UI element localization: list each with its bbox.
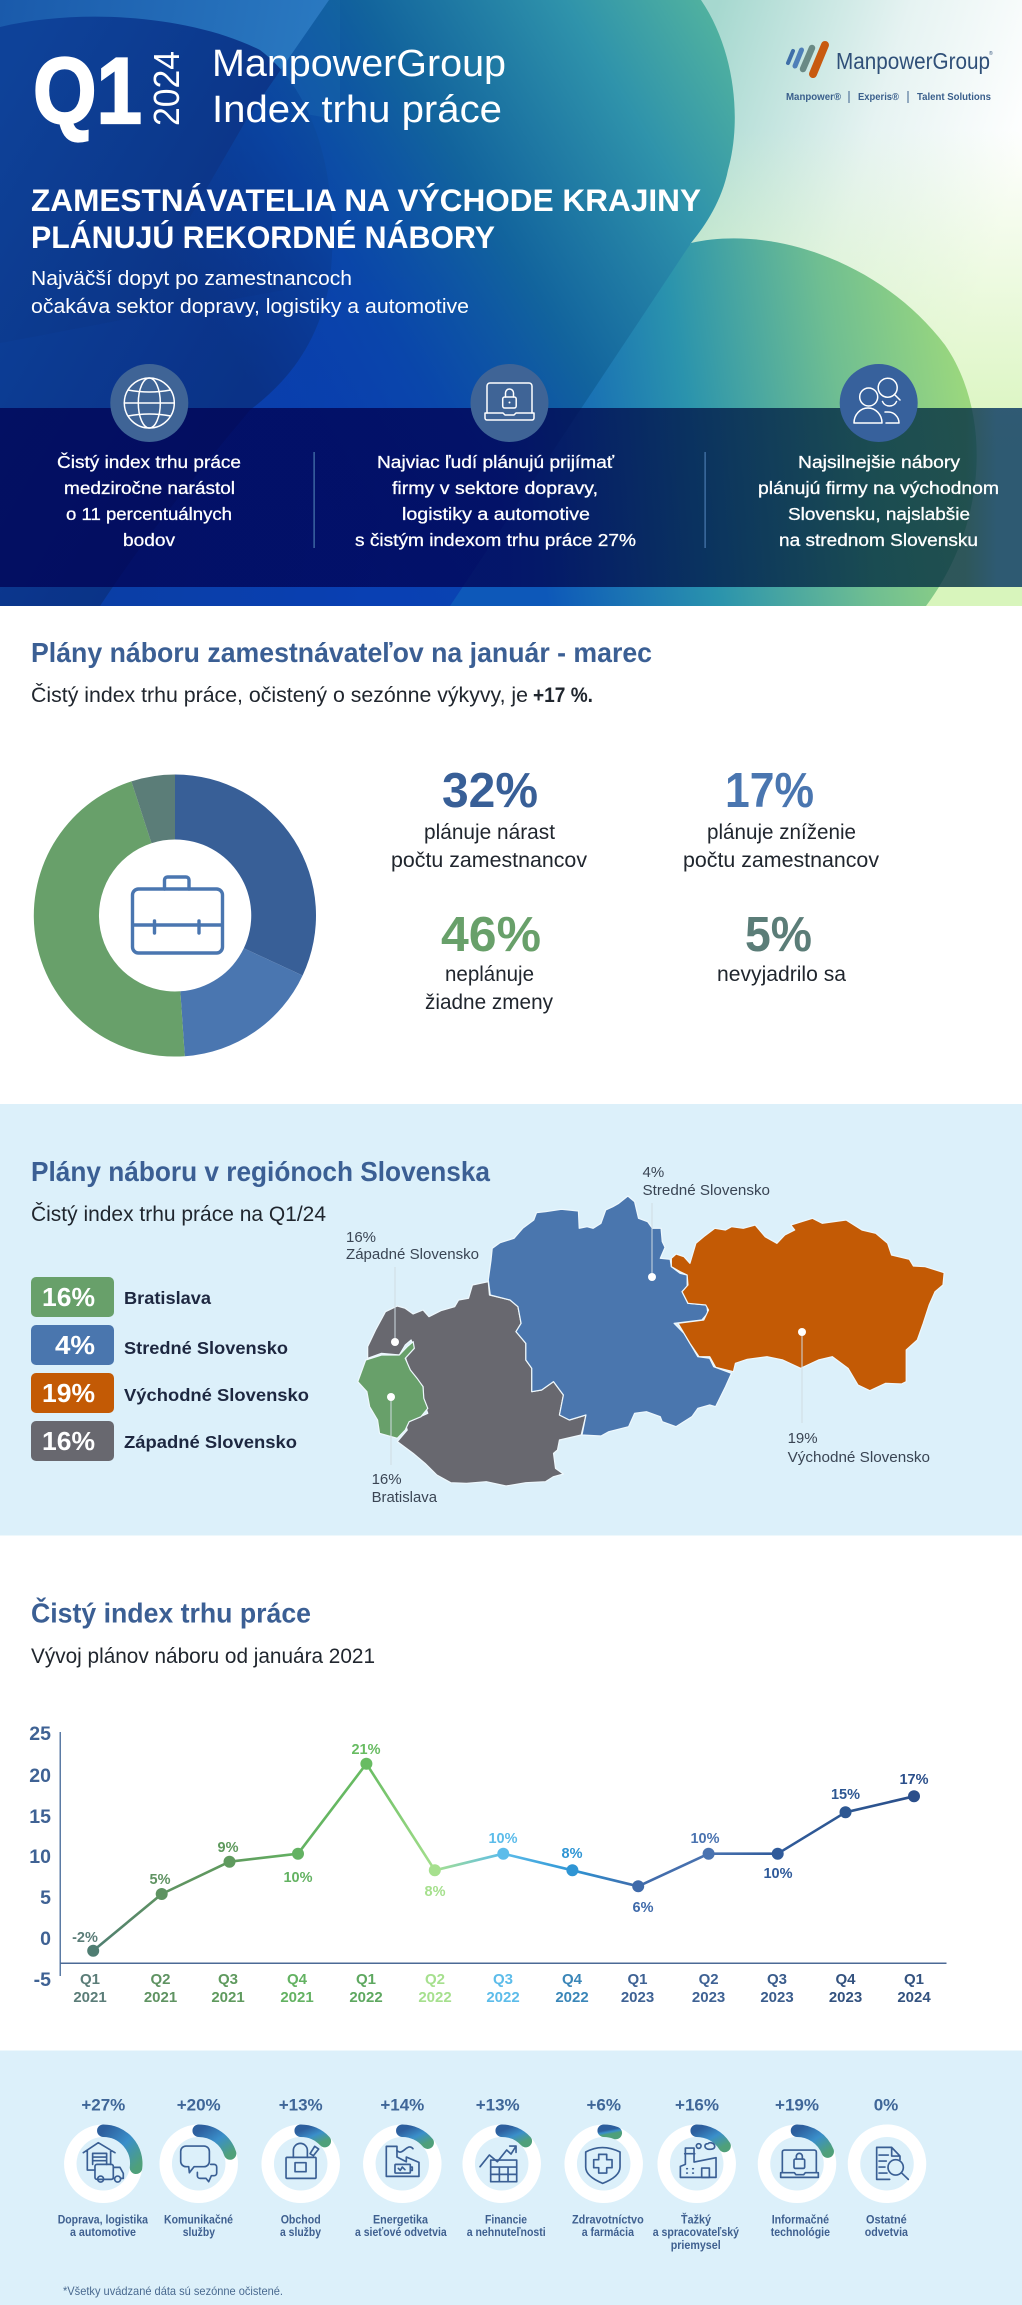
report title: Index trhu práce	[212, 89, 502, 131]
sector: transport: +27%	[81, 2096, 125, 2115]
data labels: 10%	[283, 1870, 313, 1886]
y axis with labels	[29, 1723, 61, 1991]
logo: ManpowerGroup: ManpowerGroup	[836, 48, 990, 74]
region: Bratislava	[358, 1342, 428, 1438]
stat: 5%	[717, 908, 846, 986]
legend: Bratislava	[124, 1288, 211, 1308]
data labels: 10%	[690, 1831, 720, 1847]
quarter labels: Q1	[627, 1971, 648, 1988]
sector: industry: +16%	[675, 2096, 719, 2115]
text block: year-on-year growth: o 11 percentuálnych	[66, 504, 232, 524]
quarter labels: Q4	[287, 1971, 308, 1988]
text block: transport sector: Najviac ľudí plánujú prijímať	[377, 452, 614, 472]
quarter labels: 2024	[897, 1989, 931, 2006]
stat: 46%	[425, 908, 553, 1014]
callout: Stredné Slovensko	[642, 1164, 770, 1281]
text block: year-on-year growth: bodov	[123, 530, 175, 550]
sector: transport	[58, 2096, 148, 2239]
quarter labels: 2022	[418, 1989, 452, 2006]
stat: 46%: neplánuje	[445, 963, 534, 986]
sector: IT: Informačné	[772, 2212, 829, 2226]
callout: Bratislava	[372, 1393, 438, 1506]
text block: regions	[758, 452, 999, 550]
logo: ManpowerGroup: Manpower®	[786, 91, 841, 103]
sector: IT	[764, 2096, 830, 2239]
logo: ManpowerGroup: Experis®	[858, 91, 899, 103]
quarter labels: Q1	[904, 1971, 924, 1988]
sector: energy	[355, 2096, 447, 2239]
legend: 16%	[42, 1282, 95, 1312]
sub-headline	[31, 267, 469, 318]
quarter labels: 2021	[144, 1989, 177, 2006]
quarter labels: 2023	[829, 1989, 862, 2006]
big Q1 mark: Q1	[33, 38, 142, 143]
logo: ManpowerGroup	[786, 45, 993, 103]
text block: regions: na strednom Slovensku	[779, 530, 978, 550]
text block: regions: Najsilnejšie nábory	[798, 452, 960, 472]
legend: 19%	[42, 1378, 95, 1408]
callout: Západné Slovensko	[346, 1229, 479, 1346]
stat: 32%: počtu zamestnancov	[391, 849, 588, 872]
logo: ManpowerGroup: Talent Solutions	[917, 91, 991, 103]
data labels: 9%	[218, 1840, 239, 1856]
stat: 17%	[683, 764, 880, 872]
data labels: 5%	[150, 1872, 171, 1888]
callout: Západné Slovensko: 16%	[346, 1229, 376, 1246]
callout: Bratislava: 16%	[372, 1471, 402, 1488]
data labels	[72, 1742, 929, 1946]
quarter labels: Q3	[493, 1971, 513, 1988]
quarter labels: Q3	[767, 1971, 787, 1988]
text block: regions: Slovensku, najslabšie	[788, 504, 970, 524]
sector: communication: +20%	[177, 2096, 221, 2115]
sector: trade: a služby	[280, 2225, 321, 2239]
callout: Bratislava: Bratislava	[372, 1489, 438, 1506]
text block: regions: plánujú firmy na východnom	[758, 478, 999, 498]
stat: 5%: 5%	[745, 908, 812, 962]
data labels: 15%	[831, 1787, 860, 1803]
heading: Plány náboru v regiónoch Slovenska	[31, 1156, 491, 1187]
stat: 17%: počtu zamestnancov	[683, 849, 880, 872]
quarter labels: 2021	[211, 1989, 245, 2006]
sector: other: 0%	[874, 2096, 898, 2115]
text block: transport sector: s čistým indexom trhu práce 27%	[355, 530, 636, 550]
sector: transport: a automotive	[70, 2225, 136, 2239]
sector: finance: a nehnuteľnosti	[467, 2225, 546, 2239]
data points	[87, 1758, 920, 1957]
rotated year 2024: 2024	[146, 51, 187, 126]
dark info band	[0, 408, 1022, 587]
sector: communication: služby	[183, 2225, 215, 2239]
icon: briefcase	[132, 877, 222, 953]
headline: ZAMESTNÁVATELIA NA VÝCHODE KRAJINY	[31, 182, 701, 218]
stat: 46%: žiadne zmeny	[425, 991, 553, 1014]
region: Západné Slovensko	[368, 1282, 586, 1486]
stat: 17%: 17%	[725, 764, 814, 818]
legend: 16%	[42, 1426, 95, 1456]
report title	[212, 43, 506, 131]
y axis with labels: 10	[29, 1846, 51, 1868]
quarter labels: Q1	[80, 1971, 100, 1988]
y axis with labels: 15	[29, 1806, 51, 1828]
sub-headline: Najväčší dopyt po zamestnancoch	[31, 267, 352, 290]
panel: hiring plans	[0, 606, 1022, 1104]
sector: trade: Obchod	[281, 2212, 321, 2226]
sector: other: Ostatné	[866, 2212, 907, 2226]
sector: healthcare: +6%	[586, 2096, 621, 2115]
data labels: -2%	[72, 1930, 98, 1946]
x axis	[60, 1962, 946, 1964]
data labels: 6%	[633, 1900, 654, 1916]
stat: 46%: 46%	[441, 908, 541, 962]
quarter labels: 2022	[486, 1989, 520, 2006]
legend: Západné Slovensko	[124, 1432, 297, 1452]
data labels: 17%	[899, 1772, 929, 1788]
panel: header banner	[0, 0, 1022, 606]
heading: Plány náboru zamestnávateľov na január - marec	[31, 637, 652, 668]
donut chart	[34, 774, 316, 1057]
stat: 32%	[391, 764, 588, 872]
sector: other	[854, 2096, 920, 2239]
quarter labels: Q3	[218, 1971, 238, 1988]
quarter labels: Q2	[699, 1971, 719, 1988]
panel: sectors	[0, 2050, 1022, 2305]
sector: finance: +13%	[476, 2096, 520, 2115]
quarter labels: 2022	[555, 1989, 589, 2006]
sector: healthcare: Zdravotníctvo	[572, 2212, 644, 2226]
stat: 17%: plánuje zníženie	[707, 821, 856, 844]
region: Východné Slovensko	[671, 1218, 944, 1391]
logo: ManpowerGroup: ®	[989, 50, 993, 57]
callout: Stredné Slovensko: 4%	[642, 1164, 664, 1181]
sector: trade: +13%	[279, 2096, 323, 2115]
text block: transport sector: firmy v sektore dopravy,	[392, 478, 598, 498]
stat: 32%: plánuje nárast	[424, 821, 555, 844]
data labels: 8%	[562, 1846, 583, 1862]
text block: transport sector	[355, 452, 636, 550]
headline: PLÁNUJÚ REKORDNÉ NÁBORY	[31, 219, 495, 255]
sector: finance	[467, 2096, 546, 2239]
sector: other: odvetvia	[865, 2225, 908, 2239]
quarter labels: Q2	[150, 1971, 171, 1988]
quarter labels: 2021	[280, 1989, 314, 2006]
panel: regions of Slovakia	[0, 1104, 1022, 1536]
footnote: *Všetky uvádzané dáta sú sezónne očistené.	[63, 2284, 283, 2298]
sector: communication	[164, 2096, 233, 2239]
sector: industry	[653, 2096, 739, 2252]
sector: industry: a spracovateľský	[653, 2225, 739, 2239]
stat: 32%: 32%	[442, 764, 538, 818]
header background shapes	[0, 0, 1022, 606]
quarter labels: 2022	[349, 1989, 383, 2006]
sector: healthcare: a farmácia	[582, 2225, 634, 2239]
text block: year-on-year growth: Čistý index trhu práce	[57, 451, 241, 472]
panel: net employment outlook trend	[0, 1536, 1022, 2050]
quarter labels: 2021	[73, 1989, 107, 2006]
quarter labels: Q4	[562, 1971, 583, 1988]
callout: Stredné Slovensko: Stredné Slovensko	[642, 1182, 770, 1199]
y axis with labels: 0	[40, 1928, 51, 1950]
legend: Východné Slovensko	[124, 1385, 309, 1405]
data labels: 10%	[763, 1866, 793, 1882]
quarter labels: 2023	[692, 1989, 725, 2006]
data labels: 10%	[488, 1831, 518, 1847]
quarter labels: Q1	[356, 1971, 376, 1988]
icon: laptop with lock	[470, 364, 548, 442]
quarter labels	[73, 1971, 931, 2006]
divider lines	[314, 452, 706, 548]
callout: Východné Slovensko: Východné Slovensko	[788, 1449, 930, 1466]
headline	[31, 182, 701, 255]
sector: finance: Financie	[485, 2212, 527, 2226]
quarter labels: 2023	[760, 1989, 794, 2006]
text block: year-on-year growth	[57, 451, 241, 550]
text block: transport sector: logistiky a automotive	[402, 504, 590, 524]
legend: 4%	[55, 1330, 95, 1360]
line chart	[29, 1723, 946, 2006]
callout: Východné Slovensko	[788, 1328, 930, 1466]
subheading: Čistý index trhu práce, očistený o sezónne výkyvy, je	[31, 682, 528, 707]
sector: transport: Doprava, logistika	[58, 2212, 148, 2226]
map of Slovakia	[358, 1196, 944, 1486]
y axis with labels: 20	[29, 1765, 51, 1787]
sector: energy: +14%	[380, 2096, 424, 2115]
subheading: Vývoj plánov náboru od januára 2021	[31, 1644, 375, 1668]
data labels: 21%	[351, 1742, 381, 1758]
icon: people with magnifier	[840, 364, 918, 442]
subheading: +17 %.	[533, 683, 593, 707]
sector: energy: a sieťové odvetvia	[355, 2225, 447, 2239]
sector: communication: Komunikačné	[164, 2212, 233, 2226]
sector: industry: priemysel	[671, 2238, 721, 2252]
data labels: 8%	[425, 1884, 446, 1900]
quarter labels: 2023	[621, 1989, 654, 2006]
report title: ManpowerGroup	[212, 43, 506, 85]
subheading: Čistý index trhu práce na Q1/24	[31, 1201, 326, 1226]
quarter labels: Q2	[425, 1971, 445, 1988]
icon: globe	[110, 364, 188, 442]
legend	[31, 1277, 309, 1461]
heading: Čistý index trhu práce	[31, 1596, 311, 1628]
sector: IT: +19%	[775, 2096, 819, 2115]
y axis with labels: -5	[34, 1969, 51, 1991]
sector: energy: Energetika	[373, 2212, 428, 2226]
region: Stredné Slovensko	[488, 1196, 731, 1436]
callout: Západné Slovensko: Západné Slovensko	[346, 1246, 479, 1263]
sector: healthcare	[571, 2096, 644, 2239]
y axis with labels: 5	[40, 1887, 51, 1909]
sector: trade	[268, 2096, 334, 2239]
legend: Stredné Slovensko	[124, 1338, 288, 1358]
stat: 5%: nevyjadrilo sa	[717, 963, 846, 986]
callout: Východné Slovensko: 19%	[788, 1430, 818, 1447]
y axis with labels: 25	[29, 1723, 51, 1745]
sector: industry: Ťažký	[681, 2212, 711, 2226]
sector: IT: technológie	[771, 2225, 830, 2239]
sub-headline: očakáva sektor dopravy, logistiky a automotive	[31, 295, 469, 318]
trend line	[93, 1764, 914, 1951]
quarter labels: Q4	[835, 1971, 856, 1988]
text block: year-on-year growth: medziročne narástol	[64, 478, 235, 498]
